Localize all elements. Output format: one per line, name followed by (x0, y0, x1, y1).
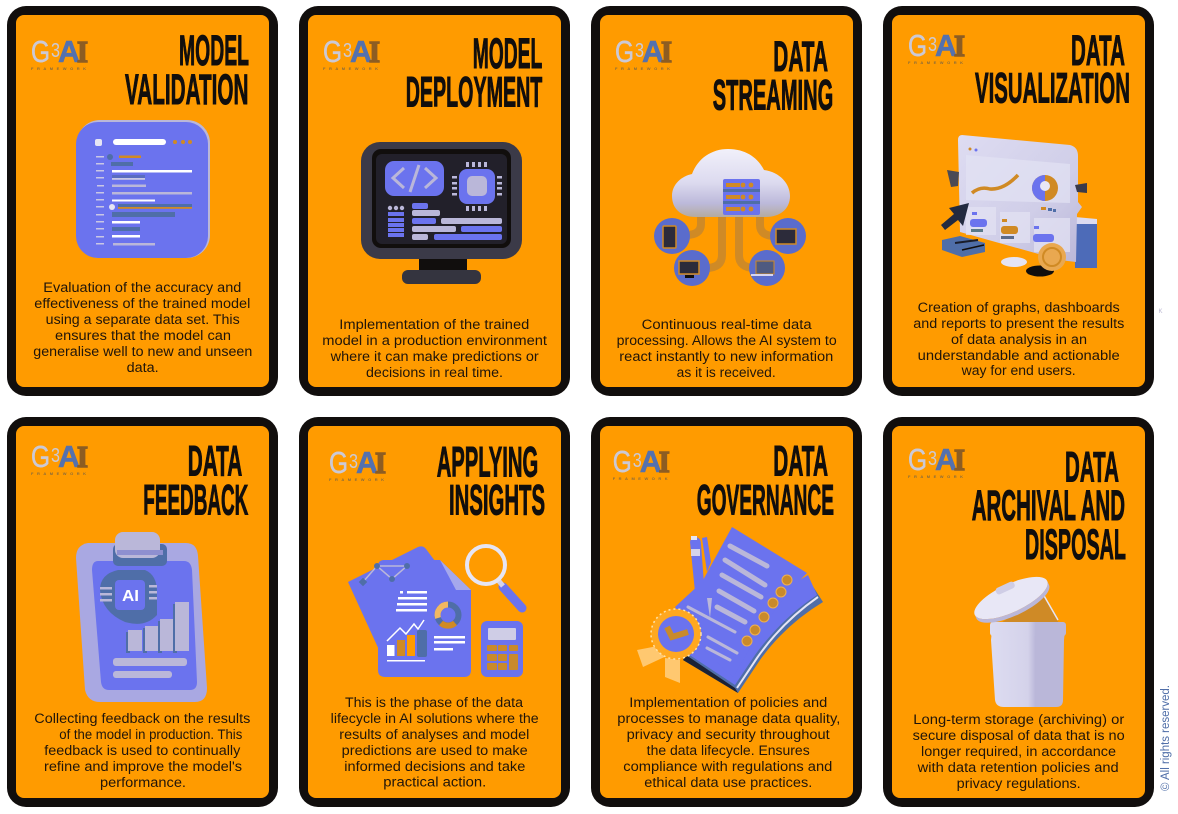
card: model deployment: DEPLOYMENT (406, 70, 542, 117)
card: data feedback (7, 417, 278, 807)
description: predictions are used to make (342, 743, 528, 758)
card: applying insights (299, 417, 570, 807)
description (34, 711, 251, 790)
logo: I (661, 34, 672, 69)
description: Collecting feedback on the results (34, 711, 251, 726)
card: model deployment (299, 6, 570, 396)
card: applying insights: INSIGHTS (449, 477, 545, 524)
logo: 3 (349, 451, 358, 473)
logo (31, 439, 88, 476)
title: DATA (1065, 445, 1119, 492)
title (697, 439, 834, 524)
logo: FRAMEWORK (329, 477, 384, 482)
title (143, 439, 248, 524)
panel frame (299, 417, 570, 807)
icon: AI clipboard (76, 532, 207, 702)
description: generalise well to new and unseen (33, 344, 252, 359)
description: longer required, in accordance (921, 744, 1116, 759)
description: Implementation of policies and (629, 695, 827, 710)
title: DATA (773, 439, 828, 486)
card: model validation (7, 6, 278, 396)
logo: 3 (635, 40, 644, 62)
description: This is the phase of the data (345, 695, 524, 710)
icon: analytics dashboard (941, 135, 1097, 276)
card: data governance (591, 417, 862, 807)
logo: A (58, 34, 80, 69)
logo (908, 28, 965, 65)
title (125, 28, 249, 114)
card: data streaming: STREAMING (713, 72, 833, 120)
description (617, 317, 837, 380)
description: where it can make predictions or (330, 349, 539, 364)
description (322, 317, 547, 380)
description: privacy regulations. (957, 776, 1081, 791)
panel frame (591, 6, 862, 396)
logo: G (31, 439, 50, 474)
description: feedback is used to continually (44, 743, 241, 758)
small mark: K (1158, 309, 1163, 315)
logo: 3 (633, 450, 642, 472)
logo: FRAMEWORK (31, 66, 86, 71)
logo: I (77, 34, 88, 69)
description: privacy and security throughout (627, 727, 830, 742)
description: of data analysis in an (951, 332, 1087, 347)
description: Continuous real-time data (642, 317, 812, 332)
description (33, 280, 252, 375)
description: Creation of graphs, dashboards (918, 300, 1120, 315)
card: model validation: VALIDATION (125, 67, 248, 114)
logo: G (323, 34, 342, 69)
description (331, 695, 539, 790)
description: as it is received. (677, 365, 776, 380)
description: model in a production environment (322, 333, 547, 348)
panel frame (883, 417, 1154, 807)
logo: 3 (928, 34, 937, 56)
card: data feedback: FEEDBACK (143, 477, 248, 524)
logo: FRAMEWORK (615, 66, 670, 71)
panel frame (883, 6, 1154, 396)
description (913, 300, 1125, 378)
logo (31, 34, 88, 71)
icon: cloud server network (654, 149, 806, 286)
logo (908, 442, 965, 479)
card: model deployment: MODEL (473, 31, 542, 78)
logo: I (77, 439, 88, 474)
logo: I (954, 28, 965, 63)
title (437, 440, 545, 524)
panel frame (7, 6, 278, 396)
description: practical action. (383, 774, 486, 790)
panel frame (7, 417, 278, 807)
card: data streaming (591, 6, 862, 396)
description: results of analyses and model (339, 727, 529, 742)
logo: G (329, 445, 348, 480)
title (406, 31, 542, 117)
description: Implementation of the trained (339, 317, 529, 332)
logo: A (642, 34, 664, 69)
panel frame (591, 417, 862, 807)
title (972, 445, 1126, 569)
logo: 3 (51, 40, 60, 62)
logo (329, 445, 386, 482)
title: APPLYING (437, 440, 538, 486)
icon: code review screen (76, 120, 210, 258)
description (913, 712, 1125, 791)
icon: monitor with code and chip (361, 142, 522, 284)
description: lifecycle in AI solutions where the (331, 711, 539, 726)
title: DATA (773, 34, 828, 81)
description: with data retention policies and (917, 760, 1119, 775)
description: understandable and actionable (918, 348, 1120, 363)
logo: 3 (51, 445, 60, 467)
logo: 3 (928, 448, 937, 470)
description (617, 695, 840, 790)
logo: FRAMEWORK (613, 476, 668, 481)
description: refine and improve the model's (44, 759, 242, 774)
description: secure disposal of data that is no (913, 728, 1125, 743)
logo (323, 34, 380, 71)
icon: policy document with badge (637, 527, 823, 693)
description: processing. Allows the AI system to (617, 333, 837, 348)
description: way for end users. (961, 363, 1076, 378)
description: ensures that the model can (55, 328, 231, 343)
logo: I (659, 444, 670, 479)
logo: A (350, 34, 372, 69)
card: data archival and disposal (883, 417, 1154, 807)
icon: trash bin (968, 568, 1066, 707)
description: data. (127, 360, 159, 375)
logo: G (615, 34, 634, 69)
description: processes to manage data quality, (617, 711, 840, 726)
logo: G (908, 442, 927, 477)
card: model validation: MODEL (179, 28, 249, 75)
description: Long-term storage (archiving) or (913, 712, 1125, 727)
logo: A (356, 445, 378, 480)
logo: FRAMEWORK (908, 60, 963, 65)
logo: G (908, 28, 927, 63)
description: informed decisions and take (344, 759, 525, 774)
panel frame (299, 6, 570, 396)
logo (615, 34, 672, 71)
logo: G (613, 444, 632, 479)
description: of the model in production. This (59, 727, 243, 742)
title (975, 28, 1130, 113)
logo: A (935, 442, 957, 477)
logo (613, 444, 670, 481)
icon: AI clipboard: AI (122, 588, 139, 605)
copyright note: © All rights reserved. (1160, 685, 1172, 791)
title (713, 34, 833, 120)
icon: reports, magnifier and calculator (348, 546, 523, 677)
description: ethical data use practices. (644, 775, 812, 790)
logo: FRAMEWORK (323, 66, 378, 71)
card: data governance: GOVERNANCE (697, 477, 834, 524)
logo: I (375, 445, 386, 480)
card: data visualization (883, 6, 1154, 396)
description: decisions in real time. (366, 365, 503, 380)
logo: A (640, 444, 662, 479)
description: effectiveness of the trained model (34, 296, 250, 311)
description: and reports to present the results (913, 316, 1125, 331)
logo: G (31, 34, 50, 69)
logo: A (935, 28, 957, 63)
logo: FRAMEWORK (908, 474, 963, 479)
logo: I (369, 34, 380, 69)
logo: FRAMEWORK (31, 471, 86, 476)
description: compliance with regulations and (623, 759, 832, 774)
logo: I (954, 442, 965, 477)
title: DATA (188, 439, 242, 486)
description: using a separate data set. This (46, 312, 240, 327)
description: performance. (100, 775, 186, 790)
logo: 3 (343, 40, 352, 62)
logo: A (58, 439, 80, 474)
description: the data lifecycle. Ensures (647, 743, 810, 758)
description: react instantly to new information (619, 349, 833, 364)
description: Evaluation of the accuracy and (43, 280, 241, 295)
